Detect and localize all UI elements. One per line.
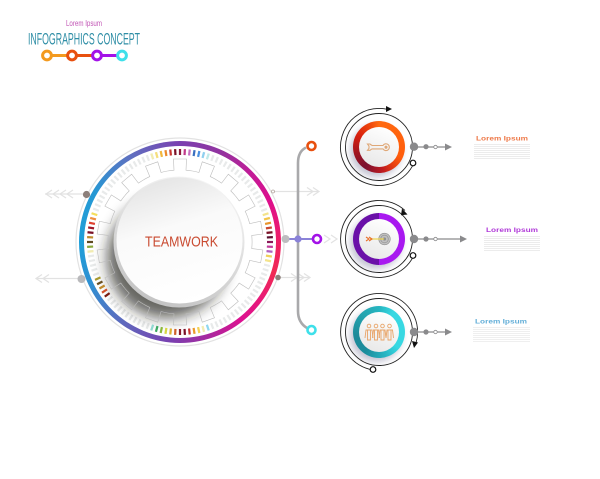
header eyebrow text: Lorem Ipsum	[66, 19, 102, 28]
step 2 shadow	[350, 217, 402, 269]
faint left arrow lower	[36, 274, 86, 283]
header: infographics concept	[28, 19, 140, 60]
coloured ticks bottom	[150, 324, 210, 335]
step 1 heading: Lorem Ipsum	[476, 136, 528, 142]
header title: INFOGRAPHICS CONCEPT	[28, 30, 140, 48]
step 2 pointer arrow	[410, 235, 467, 243]
connector branch to middle	[286, 238, 314, 240]
connector bracket	[282, 142, 321, 334]
dial inner face	[84, 146, 276, 338]
disc drop shadow	[107, 198, 227, 318]
coloured ticks lower left	[95, 276, 110, 298]
step 3 orbit lines	[341, 293, 418, 370]
faint right arrow lower	[275, 274, 310, 282]
step 1 text block	[474, 136, 530, 158]
step 2 orbit lines	[341, 200, 413, 277]
coloured ticks top	[150, 149, 210, 160]
faint right arrow upper	[272, 188, 319, 196]
step 2 badge: purple target	[341, 200, 467, 277]
gear outline	[96, 159, 264, 325]
step 3 arrowhead	[412, 341, 418, 348]
step 2 end marker	[410, 253, 416, 258]
connector node purple	[313, 235, 321, 243]
grey tick ring	[90, 152, 270, 332]
step 1 gradient ring	[353, 121, 405, 173]
step 2 text block	[484, 227, 540, 250]
icon: group of people	[365, 324, 394, 340]
step 1 end marker	[410, 160, 416, 166]
step 1 badge: orange wrench	[340, 106, 452, 185]
centre disc label: TEAMWORK	[145, 234, 218, 250]
step 3 text block	[473, 318, 530, 342]
step 3 inner disc	[359, 312, 399, 352]
step 1 body lines	[474, 144, 530, 158]
icon: target with arrow	[366, 233, 390, 245]
step 2 gradient ring	[353, 213, 405, 265]
step 2 inner disc	[359, 219, 399, 259]
step 3 heading: Lorem Ipsum	[475, 318, 527, 326]
step 2 body lines	[484, 236, 540, 250]
step 3 badge: teal team	[341, 293, 452, 372]
dial gradient ring	[79, 141, 281, 343]
icon: wrench	[368, 144, 389, 151]
step 3 gradient ring	[353, 306, 405, 358]
faint right arrow middle	[324, 235, 337, 243]
step 3 end marker	[370, 367, 376, 372]
coloured ticks left	[87, 212, 98, 253]
faint left arrow upper	[45, 190, 90, 198]
step 1 inner disc	[359, 127, 399, 167]
dial outer hairline ring	[76, 138, 284, 346]
connector node orange	[308, 142, 316, 150]
step 1 orbit lines	[340, 108, 414, 185]
step 3 pointer arrow	[410, 328, 452, 336]
step 3 body lines	[473, 328, 530, 342]
step 1 shadow	[350, 125, 402, 177]
step 2 heading: Lorem Ipsum	[486, 227, 538, 234]
connector node cyan	[308, 326, 316, 334]
coloured ticks right	[262, 212, 273, 262]
main gear dial	[76, 138, 284, 346]
step 1 pointer arrow	[410, 142, 452, 151]
step 3 shadow	[350, 310, 402, 362]
step 1 arrowhead	[386, 106, 392, 112]
step 2 arrowhead	[401, 208, 408, 215]
centre disc	[114, 176, 244, 308]
header timeline dots	[43, 51, 126, 60]
